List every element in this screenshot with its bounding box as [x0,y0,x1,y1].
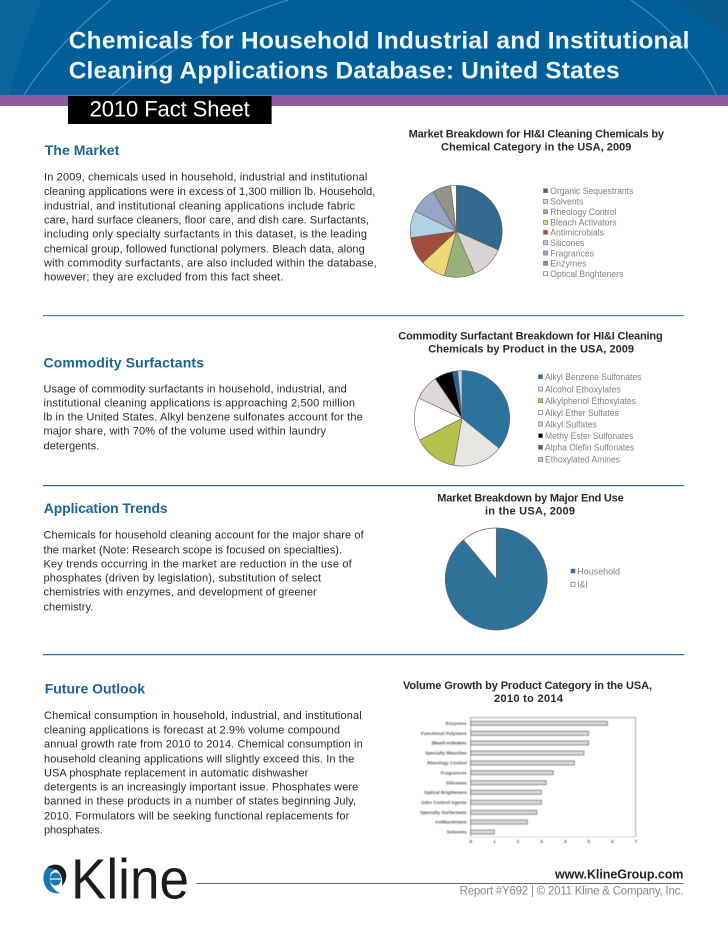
text block: the market: including only specialty surfactants in this dataset, is the leading [44,228,367,240]
text block: commodity surfactants: detergents. [44,440,99,452]
title [69,28,689,85]
bar chart: Solvents [447,830,467,835]
text block: application trends: the market (Note: Research scope is focused on specialties). [44,544,342,556]
text block: the market: cleaning applications were in excess of 1,300 million lb. Household, [44,186,375,198]
icon: e mark [43,865,66,893]
text block: future outlook: banned in these products in a number of states beginning July, [44,795,356,807]
legend [571,566,620,591]
logo: Kline [43,848,189,912]
legend: Ethoxylated Amines [545,455,620,466]
text block: the market: with commodity surfactants, are also included within the database, [43,257,377,269]
bar chart: 3 [540,839,543,844]
bar chart: 4 [564,839,567,844]
legend: Alcohol Ethoxylates [545,384,621,395]
text block: application trends: phosphates (driven by legislation), substitution of select [44,572,321,584]
legend: Household [577,566,620,577]
fact sheet tag: 2010 Fact Sheet [90,97,250,122]
title: Chemicals for Household Industrial and Institutional [69,28,689,55]
chart: volume growth by product category [403,680,652,844]
text block: future outlook: phosphates. [44,824,103,836]
chart title: Market Breakdown by Major End Use [437,493,624,505]
legend: Optical Brighteners [550,269,624,280]
text block: the market: chemical group, followed functional polymers. Bleach data, along [44,243,365,255]
legend: I&I [577,580,588,591]
bar chart: 1 [493,839,496,844]
bar chart: 5 [588,839,590,844]
legend: Alpha Olefin Sulfonates [545,443,635,454]
bar chart: 6 [611,839,614,844]
pie chart [414,371,510,466]
bar chart: Antibacterians [435,820,467,825]
legend: Methy Ester Sulfonates [545,431,634,442]
heading: application trends: Application Trends [44,500,168,516]
bar chart: Silicones [446,780,467,785]
chart title: Market Breakdown for HI&I Cleaning Chemicals by [409,128,665,140]
text block: the market [43,171,377,283]
report line: Report #Y692 | © 2011 Kline & Company, Inc. [460,885,683,897]
text block: commodity surfactants: lb in the United States. Alkyl benzene sulfonates account for the [44,411,363,423]
text block: the market: however; they are excluded from this fact sheet. [44,271,283,283]
text block: commodity surfactants: institutional cleaning applications is approaching 2,500 million [44,397,355,409]
text block: commodity surfactants: major share, with 70% of the volume used within laundry [44,425,326,437]
heading: future outlook: Future Outlook [45,681,145,697]
legend: Enzymes [550,259,587,270]
bar chart: Functional Polymers [421,731,467,736]
pie chart [410,185,502,277]
text block: the market: care, hard surface cleaners, floor care, and dish care. Surfactants, [44,214,369,226]
legend: Fragrances [550,248,594,259]
bar chart: Fragrances [441,770,467,775]
chart title: in the USA, 2009 [485,505,575,517]
text block: future outlook: household cleaning applications will slightly exceed this. In the [44,753,354,765]
legend: Solvents [550,197,584,208]
legend: Antimicrobials [550,228,604,239]
chart: market breakdown by chemical category [409,128,665,280]
website: www.KlineGroup.com [554,868,683,882]
panel: the market [43,142,377,283]
bar chart: Specialty Surfactants [420,810,467,815]
legend [538,372,642,466]
title: Cleaning Applications Database: United States [69,58,620,85]
panel: application trends [44,500,365,613]
text block: future outlook: USA phosphate replacement in automatic dishwasher [44,767,309,779]
text block: future outlook: annual growth rate from 2010 to 2014. Chemical consumption in [44,738,363,750]
text block: application trends: chemistry. [44,601,93,613]
chart title: Chemicals by Product in the USA, 2009 [428,343,634,355]
legend: Bleach Activators [550,218,617,229]
text block: application trends: Chemicals for household cleaning account for the major share of [44,529,365,541]
bar chart: 0 [470,839,473,844]
footer [43,848,683,912]
legend: Alkyl Benzene Sulfonates [545,372,642,383]
text block: future outlook: Chemical consumption in household, industrial, and institutional [44,710,362,722]
legend [544,186,634,280]
bar chart: Specialty Bleaches [425,751,467,756]
legend: Silicones [550,238,585,249]
text block: future outlook: detergents is an increasingly important issue. Phosphates were [44,781,358,793]
pie chart [445,528,547,630]
text block: application trends [44,529,365,613]
chart title: Chemical Category in the USA, 2009 [441,141,631,153]
legend: Alkylphenol Ethoxylates [545,396,636,407]
text block: future outlook: 2010. Formulators will be seeking functional replacements for [44,810,350,822]
bar chart: 2 [517,839,520,844]
bar chart: Optical Brighteners [424,790,467,795]
bar chart: Enzymes [446,721,467,726]
panel: future outlook [44,681,363,836]
text block: application trends: Key trends occurring in the market are reduction in the use of [44,558,353,570]
chart title: 2010 to 2014 [494,693,564,705]
text block: application trends: chemistries with enzymes, and development of greener [44,586,317,598]
chart title: Commodity Surfactant Breakdown for HI&I Cleaning [398,330,663,342]
heading: the market: The Market [45,142,120,158]
heading: commodity surfactants: Commodity Surfactants [44,354,204,370]
text block: the market: In 2009, chemicals used in household, industrial and institutional [44,171,367,183]
panel: commodity surfactants [44,354,363,452]
bar chart: Odor Control Agents [421,800,467,805]
bar chart [420,718,638,844]
chart title: Volume Growth by Product Category in the USA, [403,680,652,692]
chart title [403,680,652,705]
chart: commodity surfactant breakdown [398,330,663,466]
header banner [0,0,728,124]
legend: Rheology Control [550,207,617,218]
text block: the market: industrial, and institutional cleaning applications include fabric [44,200,356,212]
text block: commodity surfactants: Usage of commodity surfactants in household, industrial, and [44,383,347,395]
legend: Organic Sequestrants [550,186,634,197]
chart title [409,128,665,153]
text block: future outlook: cleaning applications is forecast at 2.9% volume compound [44,724,340,736]
legend: Alkyl Ether Sulfates [545,408,619,419]
bar chart: Rheology Control [427,761,467,766]
text block: future outlook [44,710,363,836]
bar chart: Bleach Activators [432,741,467,746]
wordmark: Kline [71,848,189,912]
chart: market breakdown by major end use [437,493,624,630]
legend: Alkyl Sulfates [545,419,597,430]
chart title [398,330,663,355]
bar chart: 7 [635,839,638,844]
chart title [437,493,624,517]
text block: commodity surfactants [44,383,363,452]
